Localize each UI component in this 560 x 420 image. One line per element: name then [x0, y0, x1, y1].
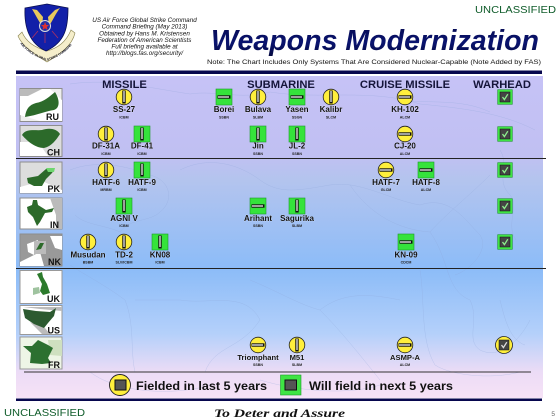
weapon: Arihant: Arihant	[244, 214, 272, 223]
weapon: DF-41: ICBM	[137, 152, 147, 156]
weapon: SS-27: SS-27	[113, 105, 136, 114]
legend: will field in next 5 years: Will field in next 5 years	[309, 379, 453, 393]
panel: country tile IN: IN	[50, 220, 59, 230]
weapon: HATF-8	[412, 162, 440, 192]
weapon: M51: M51	[290, 353, 305, 362]
weapon: Yasen: SSGN	[292, 115, 302, 119]
weapon: ASMP-A: ALCM	[400, 363, 410, 367]
panel: country tile PK: PK	[47, 184, 60, 194]
weapon: Jin	[250, 126, 266, 156]
weapon: DF-31A	[92, 126, 120, 156]
weapon: DF-31A: ICBM	[101, 152, 111, 156]
panel: country tile IN	[20, 198, 62, 230]
classification marking: top: UNCLASSIFIED	[475, 5, 556, 16]
column headings: CRUISE MISSILE	[360, 79, 451, 91]
world map outline	[70, 82, 535, 391]
weapon: SS-27	[113, 89, 136, 119]
panel: country tile US	[20, 306, 62, 336]
weapon: JL-2: SSBN	[292, 152, 302, 156]
weapon: Borei: SSBN	[219, 115, 229, 119]
weapon: Yasen: Yasen	[285, 105, 309, 114]
column headings: MISSILE	[102, 79, 147, 91]
text block: source note: US Air Force Global Strike Command	[92, 17, 197, 24]
weapon: TD-2	[115, 234, 133, 264]
panel: country tile FR: FR	[48, 360, 60, 370]
weapon: HATF-7: HATF-7	[372, 178, 400, 187]
legend: will field in next 5 years	[280, 375, 453, 395]
weapon: HATF-8: HATF-8	[412, 178, 440, 187]
weapon: DF-41	[131, 126, 154, 156]
weapon: HATF-9: ICBM	[137, 188, 147, 192]
weapon: KN-09: CDCM	[401, 260, 411, 264]
weapon: M51: SLBM	[292, 363, 302, 367]
weapon: Musudan	[70, 234, 106, 264]
panel: country tile US: US	[47, 326, 60, 336]
weapon: JL-2	[289, 126, 306, 156]
chart note: Note: The Chart Includes Only Systems That Are Considered Nuclear-Capable (Note Added by FAS)	[207, 59, 541, 66]
panel: country tile NK	[20, 234, 62, 267]
text block: source note: Full briefing available at	[111, 43, 178, 50]
weapon: HATF-8: ALCM	[421, 188, 431, 192]
top rule	[16, 70, 542, 74]
weapon: Triomphant	[237, 337, 279, 367]
panel: country tile RU: RU	[46, 112, 59, 122]
weapon: Musudan: Musudan	[70, 250, 106, 260]
motto: To Deter and Assure	[214, 406, 346, 420]
weapon: Borei: Borei	[214, 105, 234, 114]
icon: Global Strike Command shield: AIR FORCE GLOBAL STRIKE COMMAND	[20, 42, 72, 61]
icon: Global Strike Command shield	[18, 4, 76, 62]
weapon: Yasen	[285, 89, 309, 119]
weapon: KN-09	[394, 234, 418, 264]
weapon: Sagurika: Sagurika	[280, 214, 314, 223]
panel: country tile UK: UK	[47, 294, 60, 304]
weapon: DF-41: DF-41	[131, 142, 154, 150]
weapon: Musudan: BSBM	[83, 260, 93, 264]
classification marking: bottom: UNCLASSIFIED	[4, 408, 85, 419]
weapon: Sagurika	[280, 198, 314, 228]
panel: country tile CH: CH	[47, 148, 60, 158]
weapon: DF-31A: DF-31A	[92, 142, 120, 150]
warhead: CH	[498, 127, 512, 141]
panel: weapons chart background	[16, 76, 543, 398]
weapon: HATF-7: GLCM	[381, 188, 391, 192]
weapon: AGNI V: ICBM	[119, 224, 129, 228]
weapon: KH-102: ALCM	[400, 115, 410, 119]
weapon: KH-102	[391, 89, 419, 119]
weapon: Bulava	[245, 89, 272, 119]
weapon: Sagurika: SLBM	[292, 224, 302, 228]
panel: country tile NK: NK	[48, 257, 61, 267]
weapon: HATF-6: HATF-6	[92, 178, 120, 187]
weapon: AGNI V: AGNI V	[110, 214, 138, 223]
column headings: SUBMARINE	[247, 79, 315, 91]
weapon: AGNI V	[110, 198, 138, 228]
weapon: CJ-20: ALCM	[400, 152, 410, 156]
weapon: Arihant	[244, 198, 272, 228]
weapon: HATF-9: HATF-9	[128, 178, 156, 187]
weapon: Triomphant: Triomphant	[237, 353, 279, 362]
panel: country tile RU	[20, 88, 62, 122]
weapon: JL-2: JL-2	[289, 142, 306, 150]
panel: country tile CH	[20, 126, 62, 158]
weapon: Kalibr: SLCM	[326, 115, 336, 119]
weapon: HATF-6: MRBM	[100, 188, 112, 192]
weapon: TD-2: TD-2	[115, 250, 133, 260]
panel: country tile PK	[20, 162, 62, 194]
weapon: Borei	[214, 89, 234, 119]
weapon: HATF-7	[372, 162, 400, 192]
weapon: ASMP-A: ASMP-A	[390, 353, 420, 362]
title: Weapons Modernization	[211, 25, 539, 57]
weapon: Kalibr: Kalibr	[320, 105, 342, 114]
weapon: KN-09: KN-09	[394, 250, 418, 260]
weapon: KH-102: KH-102	[391, 105, 419, 114]
weapon: Triomphant: SSBN	[253, 363, 263, 367]
weapon: ASMP-A	[390, 337, 420, 367]
weapon: HATF-9	[128, 162, 156, 192]
weapon: Jin: SSBN	[253, 152, 263, 156]
weapon: KN08: ICBM	[155, 260, 165, 264]
weapon: Kalibr	[320, 89, 342, 119]
text block: source note: http://blogs.fas.org/security/	[106, 50, 184, 57]
bottom rule	[16, 398, 542, 401]
text block: source note: Federation of American Scientists	[98, 37, 192, 44]
legend: fielded in last 5 years	[110, 374, 267, 396]
warhead: PK	[498, 163, 512, 177]
weapon: TD-2: SLV/ICBM	[116, 260, 132, 264]
weapon: SS-27: ICBM	[119, 115, 129, 119]
weapon: KN08: KN08	[150, 250, 171, 260]
weapon: CJ-20: CJ-20	[394, 142, 416, 150]
weapon: Jin: Jin	[252, 142, 264, 150]
weapon: KN08	[150, 234, 171, 264]
weapon: Arihant: SSBN	[253, 224, 263, 228]
page number: 5	[551, 411, 555, 418]
weapon: HATF-6	[92, 162, 120, 192]
weapon: Bulava: Bulava	[245, 105, 272, 114]
text block: source note: Command Briefing (May 2013)	[102, 24, 187, 31]
warhead: RU	[498, 90, 512, 104]
row dividers	[16, 158, 546, 268]
warhead: FR	[496, 336, 512, 354]
column headings	[102, 79, 531, 91]
panel: country tile FR	[20, 337, 62, 370]
legend: fielded in last 5 years: Fielded in last 5 years	[136, 379, 267, 393]
panel: country tile UK	[20, 270, 62, 304]
weapon: M51	[289, 337, 305, 367]
warhead: NK	[498, 235, 512, 249]
weapon: CJ-20	[394, 126, 416, 156]
text block: source note	[92, 17, 197, 57]
weapon: Bulava: SLBM	[253, 115, 263, 119]
column headings: WARHEAD	[473, 79, 531, 91]
text block: source note: Obtained by Hans M. Kristensen	[99, 30, 190, 37]
warhead: IN	[498, 199, 512, 213]
